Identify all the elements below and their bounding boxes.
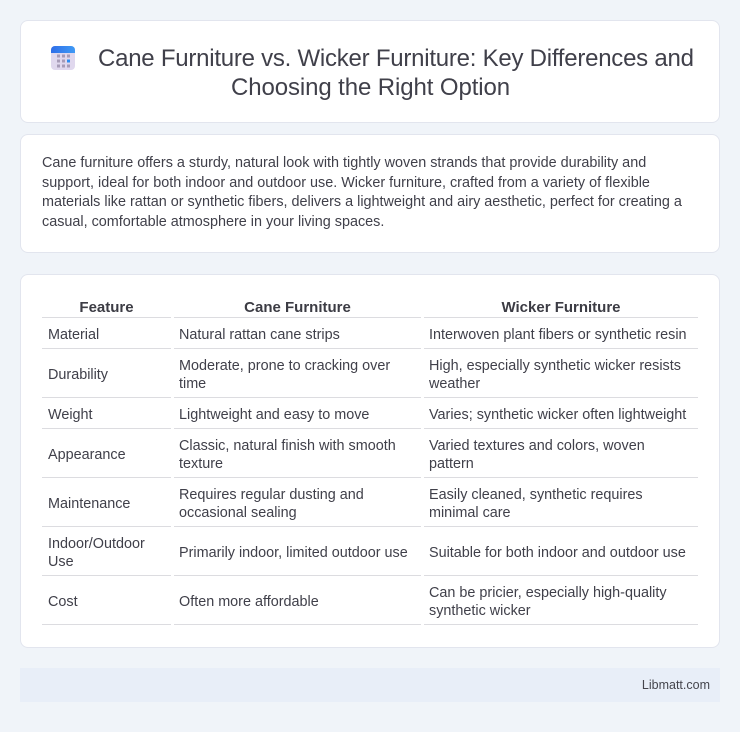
row: material: Natural rattan cane strips	[179, 327, 340, 343]
panel: comparison table card	[20, 274, 720, 648]
row: indoor/outdoor use: Suitable for both indoor and outdoor use	[429, 545, 686, 561]
panel: introduction card	[20, 134, 720, 253]
row: cost: Often more affordable	[179, 594, 319, 610]
footer bar	[20, 668, 720, 702]
row: maintenance: occasional sealing	[179, 505, 297, 521]
row: durability	[42, 358, 698, 398]
row: maintenance: Easily cleaned, synthetic requires	[429, 487, 643, 503]
text block: introduction: Cane furniture offers a sturdy, natural look with tightly woven strands that provide durability and	[42, 155, 646, 171]
row: durability: weather	[429, 376, 480, 392]
text block: introduction: casual, comfortable atmosphere in your living spaces.	[42, 214, 384, 230]
icon: calendar	[51, 46, 75, 70]
row: weight	[42, 407, 698, 429]
row: cost: Can be pricier, especially high-quality	[429, 585, 667, 601]
row: maintenance: minimal care	[429, 505, 511, 521]
row: indoor/outdoor use: Primarily indoor, limited outdoor use	[179, 545, 408, 561]
row: weight: Lightweight and easy to move	[179, 407, 369, 423]
row: cost	[42, 585, 698, 625]
row: weight: Weight	[48, 407, 93, 423]
title: Choosing the Right Option	[231, 74, 510, 101]
row: durability: High, especially synthetic wicker resists	[429, 358, 681, 374]
table header row: Cane Furniture	[244, 299, 351, 316]
row: appearance: Varied textures and colors, woven	[429, 438, 645, 454]
row: indoor/outdoor use	[42, 536, 698, 576]
row: material	[42, 327, 698, 349]
footer text: site name: Libmatt.com	[642, 678, 710, 692]
row: durability: Moderate, prone to cracking over	[179, 358, 390, 374]
row: weight: Varies; synthetic wicker often lightweight	[429, 407, 686, 423]
text block: introduction	[42, 155, 682, 230]
row: maintenance: Maintenance	[48, 496, 130, 512]
title	[98, 45, 694, 101]
row: appearance: pattern	[429, 456, 474, 472]
table header row: Feature	[79, 299, 134, 316]
title: Cane Furniture vs. Wicker Furniture: Key Differences and	[98, 45, 694, 72]
table header row	[42, 299, 698, 318]
row: cost: synthetic wicker	[429, 603, 531, 619]
table header row: Wicker Furniture	[501, 299, 621, 316]
row: appearance: Appearance	[48, 447, 126, 463]
row: maintenance	[42, 487, 698, 527]
row: maintenance: Requires regular dusting and	[179, 487, 364, 503]
row: indoor/outdoor use: Indoor/Outdoor	[48, 536, 145, 552]
comparison table	[42, 299, 698, 625]
text block: introduction: materials like rattan or synthetic fibers, delivers a lightweight and airy aesthetic, perfect for creating a	[42, 194, 682, 210]
text block: introduction: support, ideal for both indoor and outdoor use. Wicker furniture, crafted from a variety of flexible	[42, 175, 650, 191]
row: appearance: texture	[179, 456, 223, 472]
row: appearance: Classic, natural finish with smooth	[179, 438, 396, 454]
row: material: Material	[48, 327, 99, 343]
row: cost: Cost	[48, 594, 78, 610]
row: appearance	[42, 438, 698, 478]
row: durability: Durability	[48, 367, 108, 383]
panel: header card	[20, 20, 720, 123]
row: material: Interwoven plant fibers or synthetic resin	[429, 327, 687, 343]
row: indoor/outdoor use: Use	[48, 554, 74, 570]
row: durability: time	[179, 376, 206, 392]
